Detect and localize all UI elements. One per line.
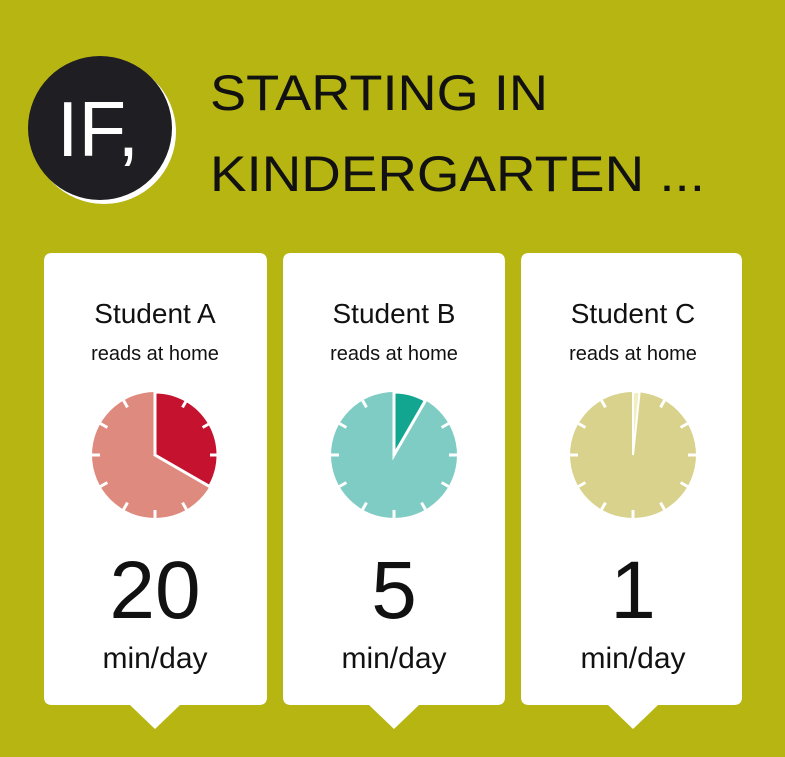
panel: Student A: 20 [109, 545, 201, 636]
panel: Student B [283, 253, 505, 729]
panel: Student A: min/day [102, 642, 208, 675]
panel: Student C [521, 253, 742, 729]
panel: Student B: Student B [333, 298, 455, 329]
panel: Student C: 1 [610, 545, 656, 636]
panel: Student A: Student A [94, 298, 216, 329]
title: KINDERGARTEN ... [210, 146, 705, 202]
chart: clock 20 min [92, 392, 218, 518]
panel: Student C: min/day [580, 642, 686, 675]
title: STARTING IN [210, 65, 548, 121]
panel: Student B: 5 [371, 545, 417, 636]
panel: Student A [44, 253, 267, 729]
panel: Student C: reads at home [569, 343, 697, 365]
panel: Student A: reads at home [91, 343, 219, 365]
icon: IF badge: IF, [57, 85, 139, 173]
panel: Student C: Student C [571, 298, 695, 329]
panel: Student B: min/day [341, 642, 447, 675]
chart: clock 1 min [570, 392, 696, 518]
chart: clock 5 min [331, 392, 457, 518]
icon: IF badge [28, 56, 176, 204]
title [210, 65, 705, 202]
panel: Student B: reads at home [330, 343, 458, 365]
